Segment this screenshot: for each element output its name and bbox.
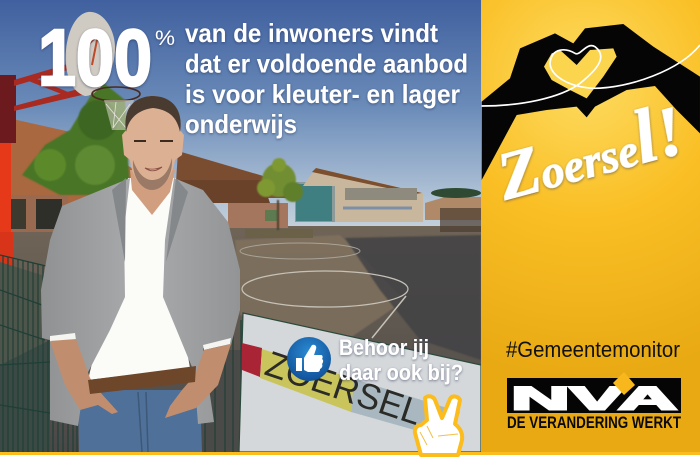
basketball hoop xyxy=(0,12,140,240)
heading: Zoersel script: Zoersel! xyxy=(487,86,693,217)
sign logo stripes xyxy=(242,343,262,377)
icon: heart hands xyxy=(482,24,700,180)
shirt xyxy=(88,178,190,380)
text block: headline: is voor kleuter- en lager xyxy=(185,79,460,109)
sky xyxy=(0,0,481,235)
jeans xyxy=(78,390,202,452)
sign board xyxy=(239,313,481,452)
percent sign: % xyxy=(155,27,175,50)
text block: headline: onderwijs xyxy=(185,109,297,139)
head xyxy=(122,96,184,190)
text block: headline xyxy=(185,18,468,139)
cuffs xyxy=(50,333,231,350)
person xyxy=(41,96,240,452)
panel: school photo xyxy=(0,0,481,452)
neck xyxy=(130,170,175,215)
big tree xyxy=(22,80,130,195)
jacket xyxy=(41,178,240,426)
fence xyxy=(0,255,243,452)
text block: headline: dat er voldoende aanbod xyxy=(185,48,468,78)
icon: victory hand xyxy=(415,396,462,455)
school buildings xyxy=(8,118,481,238)
panel: gold sidebar xyxy=(481,0,700,452)
callout: behoor jij: Behoor jij xyxy=(339,335,429,360)
hashtag: #Gemeentemonitor xyxy=(506,337,680,362)
arms and hands xyxy=(50,339,118,414)
callout: behoor jij: daar ook bij? xyxy=(339,360,463,385)
logo letters: NVA xyxy=(511,380,677,417)
belt xyxy=(88,366,196,394)
logo diamond xyxy=(613,372,635,395)
headline: 100% xyxy=(38,13,175,102)
sign text: ZOERSEL xyxy=(260,343,427,433)
callout: behoor jij xyxy=(339,335,463,385)
big number: 100 xyxy=(38,13,152,102)
text block: headline: van de inwoners vindt xyxy=(185,18,438,48)
icon: thumbs up xyxy=(287,337,331,381)
small tree xyxy=(257,158,303,230)
logo: N-VA xyxy=(507,372,681,432)
bottom yellow stripe xyxy=(0,452,700,455)
red post xyxy=(0,232,13,266)
schoolyard ground xyxy=(0,226,481,452)
